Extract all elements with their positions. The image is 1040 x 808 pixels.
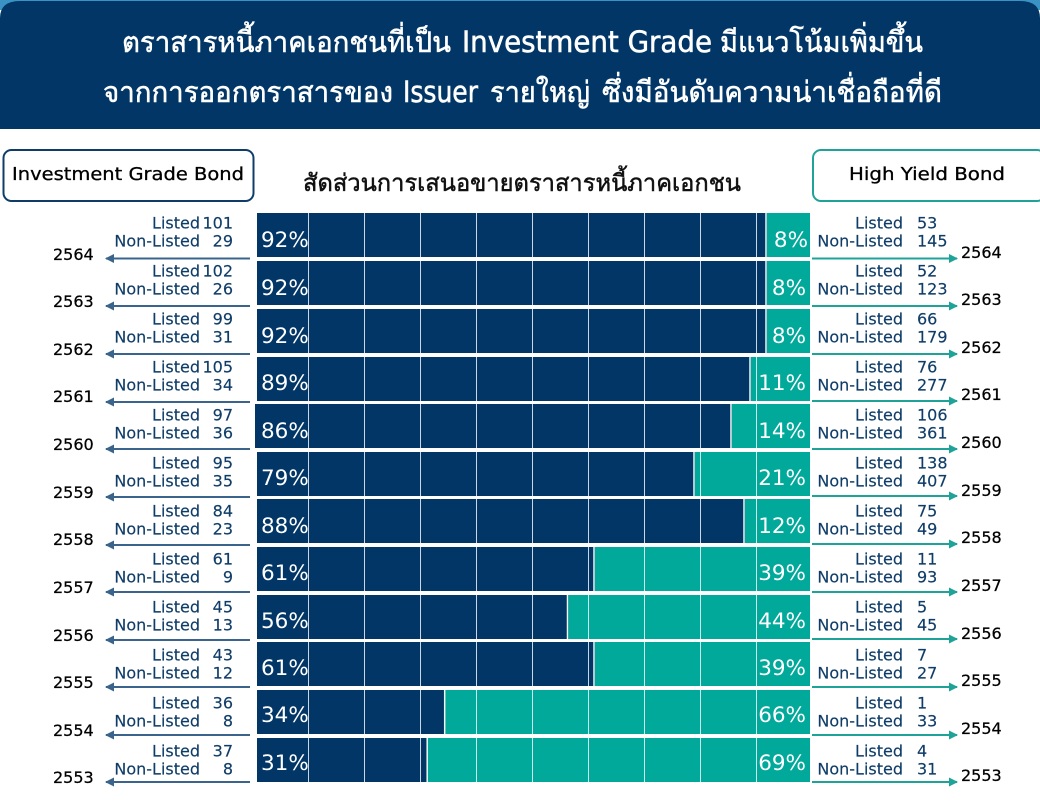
investment grade listed counts: 23 [213, 520, 233, 539]
investment grade listed counts: Non-Listed [114, 712, 200, 731]
high yield listed counts: 45 [917, 616, 937, 635]
high yield listed counts: Non-Listed [817, 232, 903, 251]
investment grade listed counts: 95 [213, 454, 233, 473]
years: left: 2562 [53, 340, 94, 359]
investment grade listed counts: Non-Listed [114, 520, 200, 539]
years: left: 2564 [53, 245, 94, 264]
high yield listed counts: 4 [917, 742, 927, 761]
investment grade listed counts: Listed [152, 502, 200, 521]
years: left: 2557 [53, 578, 94, 597]
legend: High Yield Bond: High Yield Bond [849, 164, 1005, 185]
years: right: 2558 [961, 528, 1002, 547]
investment grade listed counts: 26 [213, 280, 233, 299]
percent labels: investment grade: 89% [261, 371, 309, 396]
years: right: 2556 [961, 624, 1002, 643]
years: right: 2564 [961, 243, 1002, 262]
high yield listed counts: Listed [855, 646, 903, 665]
high yield listed counts: Listed [855, 310, 903, 329]
years: right: 2563 [961, 290, 1002, 309]
percent labels: high yield: 39% [758, 656, 806, 681]
high yield listed counts: Listed [855, 454, 903, 473]
high yield listed counts: 1 [917, 694, 927, 713]
percent labels: investment grade: 61% [261, 561, 309, 586]
years: left: 2563 [53, 292, 94, 311]
legend: Investment Grade Bond [4, 150, 254, 201]
percent labels: high yield: 44% [758, 609, 806, 634]
investment grade listed counts: 102 [202, 262, 233, 281]
high yield listed counts: 407 [917, 472, 948, 491]
high yield listed counts: Listed [855, 358, 903, 377]
investment grade listed counts: 34 [213, 376, 233, 395]
percent labels: investment grade: 56% [261, 609, 309, 634]
high yield listed counts: Listed [855, 742, 903, 761]
high yield listed counts: 5 [917, 598, 927, 617]
legend: High Yield Bond [813, 150, 1040, 201]
investment grade listed counts: 36 [213, 424, 233, 443]
years: left [53, 245, 94, 787]
investment grade listed counts: 8 [223, 712, 233, 731]
title banner: Investment Grade [462, 25, 712, 59]
investment grade listed counts: Non-Listed [114, 376, 200, 395]
percent labels: high yield: 14% [758, 419, 806, 444]
years: left: 2561 [53, 387, 94, 406]
percent labels: high yield: 11% [758, 371, 806, 396]
years: right: 2562 [961, 338, 1002, 357]
investment grade listed counts [114, 214, 233, 779]
investment grade listed counts: 12 [213, 664, 233, 683]
investment grade listed counts: Non-Listed [114, 472, 200, 491]
investment grade listed counts: Non-Listed [114, 664, 200, 683]
percent labels: high yield: 8% [772, 276, 806, 301]
title banner: มีแนวโน้มเพิ่มขึ้น [720, 21, 923, 59]
investment grade listed counts: Non-Listed [114, 760, 200, 779]
percent labels: investment grade: 61% [261, 656, 309, 681]
percent labels: high yield: 12% [758, 514, 806, 539]
investment grade listed counts: 61 [213, 550, 233, 569]
high yield listed counts: 7 [917, 646, 927, 665]
percent labels: high yield: 8% [774, 228, 808, 253]
high yield listed counts: Listed [855, 214, 903, 233]
investment grade listed counts: 9 [223, 568, 233, 587]
percent labels: high yield: 66% [758, 703, 806, 728]
years: right: 2557 [961, 576, 1002, 595]
years: left: 2558 [53, 530, 94, 549]
years: right: 2554 [961, 719, 1002, 738]
high yield listed counts: Non-Listed [817, 520, 903, 539]
investment grade listed counts: Listed [152, 550, 200, 569]
high yield listed counts: Listed [855, 502, 903, 521]
years: left: 2556 [53, 626, 94, 645]
investment grade listed counts: 99 [213, 310, 233, 329]
investment grade listed counts: 101 [202, 214, 233, 233]
investment grade listed counts: Listed [152, 358, 200, 377]
corner accent [0, 0, 1040, 10]
high yield listed counts: 11 [917, 550, 937, 569]
investment grade listed counts: Non-Listed [114, 616, 200, 635]
high yield listed counts: 53 [917, 214, 937, 233]
high yield listed counts: Non-Listed [817, 664, 903, 683]
investment grade listed counts: Listed [152, 694, 200, 713]
high yield listed counts: Non-Listed [817, 280, 903, 299]
investment grade listed counts: 36 [213, 694, 233, 713]
title banner: รายใหญ่ [490, 75, 590, 109]
investment grade listed counts: 105 [202, 358, 233, 377]
high yield listed counts [817, 214, 948, 779]
percent labels: investment grade: 92% [261, 276, 309, 301]
percent labels: high yield: 39% [758, 561, 806, 586]
years: right: 2553 [961, 766, 1002, 785]
high yield listed counts: Non-Listed [817, 712, 903, 731]
title banner: Issuer [403, 75, 478, 109]
years: right: 2555 [961, 671, 1002, 690]
investment grade listed counts: 84 [213, 502, 233, 521]
investment grade listed counts: Listed [152, 742, 200, 761]
investment grade listed counts: Non-Listed [114, 424, 200, 443]
title banner: ตราสารหนี้ภาคเอกชนที่เป็น [122, 21, 451, 59]
high yield listed counts: 123 [917, 280, 948, 299]
high yield listed counts: 75 [917, 502, 937, 521]
years: left: 2554 [53, 721, 94, 740]
percent labels: investment grade: 34% [261, 703, 309, 728]
title banner [0, 1, 1040, 129]
percent labels: investment grade: 86% [261, 419, 309, 444]
high yield listed counts: 52 [917, 262, 937, 281]
high yield listed counts: Non-Listed [817, 424, 903, 443]
high yield listed counts: Non-Listed [817, 616, 903, 635]
investment grade listed counts: 35 [213, 472, 233, 491]
high yield listed counts: 66 [917, 310, 937, 329]
years: right [961, 243, 1002, 785]
investment grade listed counts: Listed [152, 310, 200, 329]
investment grade listed counts: Listed [152, 262, 200, 281]
high yield listed counts: 31 [917, 760, 937, 779]
high yield listed counts: Listed [855, 262, 903, 281]
percent labels: investment grade [261, 228, 309, 776]
high yield listed counts: 93 [917, 568, 937, 587]
investment grade listed counts: 97 [213, 406, 233, 425]
percent labels: investment grade: 31% [261, 751, 309, 776]
investment grade listed counts: 29 [213, 232, 233, 251]
legend: Investment Grade Bond: Investment Grade Bond [12, 164, 244, 185]
percent labels: investment grade: 92% [261, 324, 309, 349]
chart heading: สัดส่วนการเสนอขายตราสารหนี้ภาคเอกชน [303, 165, 741, 197]
years: left: 2560 [53, 435, 94, 454]
high yield listed counts: 145 [917, 232, 948, 251]
percent labels: high yield [758, 228, 808, 776]
high yield listed counts: Listed [855, 550, 903, 569]
stacked bar chart [255, 213, 812, 782]
high yield listed counts: Non-Listed [817, 760, 903, 779]
high yield listed counts: Listed [855, 694, 903, 713]
high yield listed counts: 33 [917, 712, 937, 731]
high yield listed counts: 106 [917, 406, 948, 425]
investment grade listed counts: Non-Listed [114, 280, 200, 299]
title banner: จากการออกตราสารของ [103, 75, 393, 109]
high yield listed counts: Listed [855, 406, 903, 425]
investment grade listed counts: 13 [213, 616, 233, 635]
high yield listed counts: 179 [917, 328, 948, 347]
investment grade listed counts: 43 [213, 646, 233, 665]
high yield listed counts: Non-Listed [817, 328, 903, 347]
high yield listed counts: 361 [917, 424, 948, 443]
high yield listed counts: Non-Listed [817, 376, 903, 395]
investment grade listed counts: 45 [213, 598, 233, 617]
years: right: 2561 [961, 385, 1002, 404]
left arrows [106, 258, 250, 782]
percent labels: investment grade: 92% [261, 228, 309, 253]
investment grade listed counts: Non-Listed [114, 568, 200, 587]
percent labels: high yield: 21% [758, 466, 806, 491]
investment grade listed counts: Listed [152, 214, 200, 233]
high yield listed counts: Non-Listed [817, 472, 903, 491]
percent labels: investment grade: 79% [261, 466, 309, 491]
investment grade listed counts: 31 [213, 328, 233, 347]
high yield listed counts: Non-Listed [817, 568, 903, 587]
investment grade listed counts: Non-Listed [114, 232, 200, 251]
high yield listed counts: 138 [917, 454, 948, 473]
high yield listed counts: 27 [917, 664, 937, 683]
high yield listed counts: Listed [855, 598, 903, 617]
percent labels: investment grade: 88% [261, 514, 309, 539]
high yield listed counts: 76 [917, 358, 937, 377]
high yield listed counts: 49 [917, 520, 937, 539]
years: left: 2553 [53, 768, 94, 787]
title banner: ซึ่งมีอันดับความน่าเชื่อถือที่ดี [602, 72, 942, 109]
percent labels: high yield: 69% [758, 751, 806, 776]
investment grade listed counts: 8 [223, 760, 233, 779]
investment grade listed counts: 37 [213, 742, 233, 761]
years: right: 2560 [961, 433, 1002, 452]
years: left: 2559 [53, 483, 94, 502]
investment grade listed counts: Non-Listed [114, 328, 200, 347]
years: right: 2559 [961, 481, 1002, 500]
years: left: 2555 [53, 673, 94, 692]
high yield listed counts: 277 [917, 376, 948, 395]
investment grade listed counts: Listed [152, 598, 200, 617]
investment grade listed counts: Listed [152, 406, 200, 425]
percent labels: high yield: 8% [772, 324, 806, 349]
right arrows [812, 258, 957, 782]
investment grade listed counts: Listed [152, 454, 200, 473]
investment grade listed counts: Listed [152, 646, 200, 665]
